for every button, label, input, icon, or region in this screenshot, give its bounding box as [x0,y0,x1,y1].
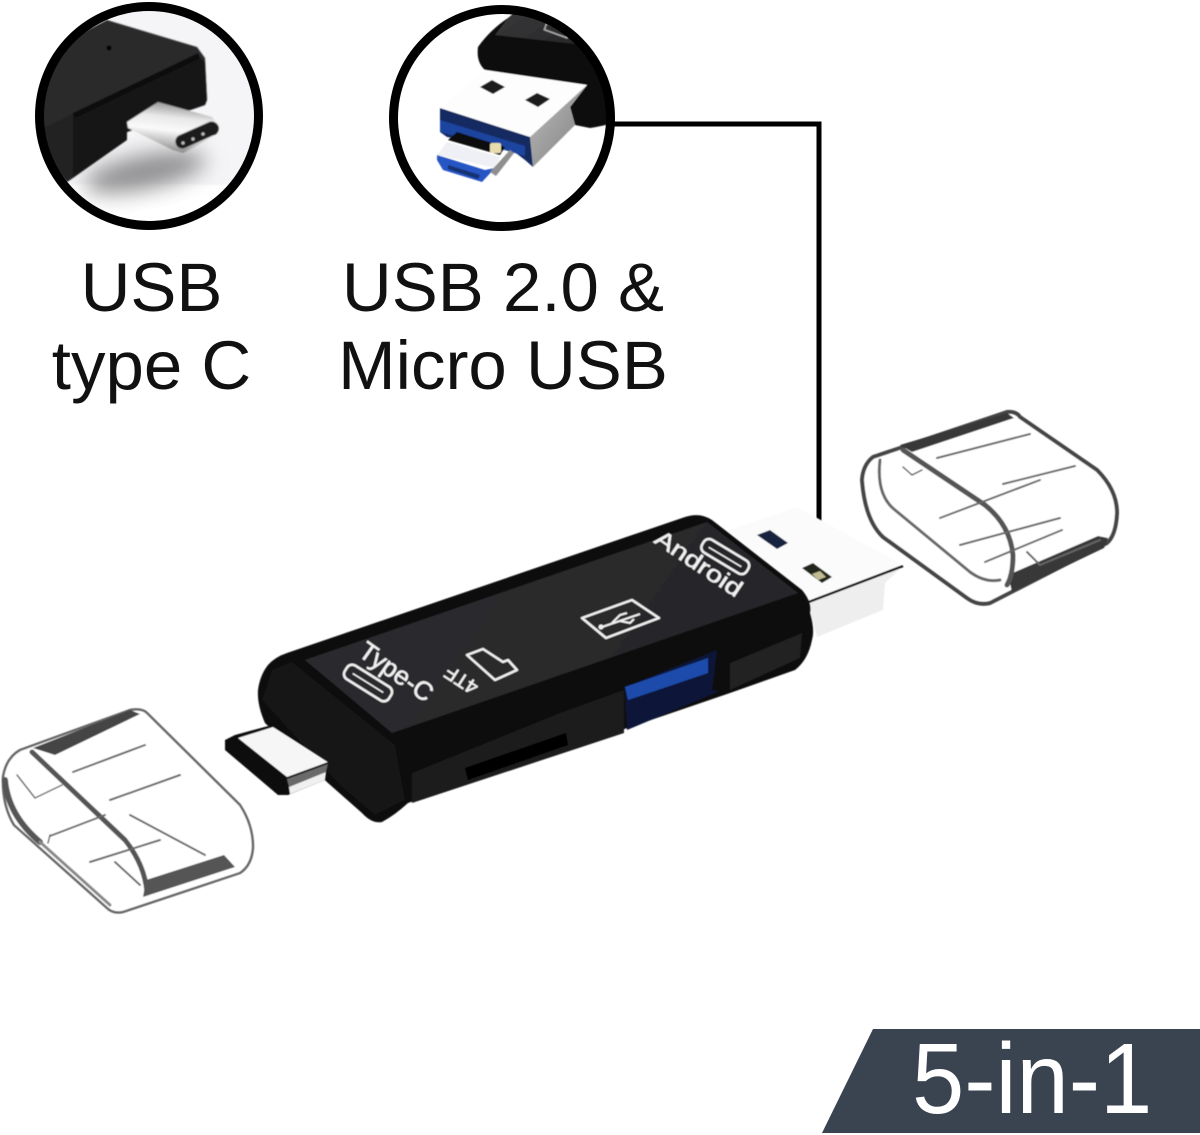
USB-A port [625,650,728,730]
connector leader line [612,124,819,531]
body end cap shading [262,662,405,815]
card icon [467,649,517,680]
connector photo: USB 2.0 and Micro USB [391,0,630,229]
Type-C label: Type-C [354,635,439,708]
label: USB type C: USB [81,249,222,326]
label: USB 2.0 and Micro USB: Micro USB [338,327,668,404]
USB-A plug [728,507,903,637]
Type-C plug [225,725,328,795]
body side panel [412,690,624,803]
body end panel right [730,633,802,690]
label: USB type C: type C [52,327,251,404]
connector photo: USB type C [30,4,261,235]
label: USB 2.0 and Micro USB: USB 2.0 & [342,249,664,326]
micro SD slot [465,733,568,780]
transparent cap left [3,709,253,912]
badge: 5-in-1 [822,1022,1200,1135]
port icon bottom [342,662,394,704]
badge: 5-in-1: 5-in-1 [912,1022,1152,1135]
port icon top [699,537,751,576]
USB icon [582,600,659,638]
4TF label: 4TF [441,660,483,698]
Android label: Android [650,524,748,602]
transparent cap right [862,412,1117,604]
card reader body [258,515,813,822]
body top face [305,522,798,733]
